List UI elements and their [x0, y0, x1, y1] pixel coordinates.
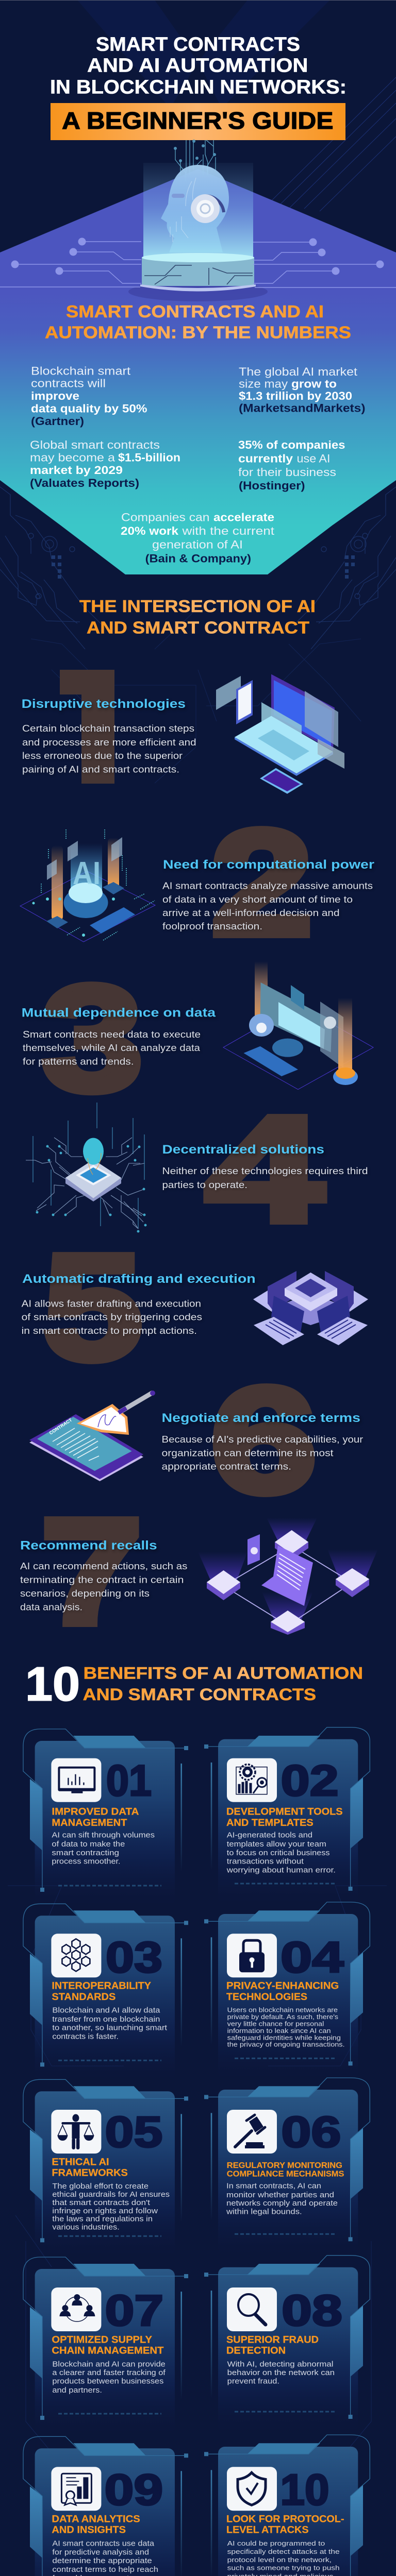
stat: global smart contracts: $1.5-billion	[118, 451, 180, 464]
title: DEVELOPMENT TOOLS	[226, 1806, 343, 1818]
item 2 text	[162, 881, 373, 931]
stat: accelerate 20% work: (Bain & Company)	[145, 552, 251, 565]
title: IMPROVED DATA	[52, 1806, 139, 1818]
body: process smoother.	[52, 1858, 121, 1866]
heading text	[83, 1664, 363, 1704]
big number 5: 5	[43, 1223, 143, 1391]
title	[227, 2161, 344, 2178]
title	[52, 2514, 140, 2536]
faint network lines	[31, 608, 361, 783]
illustration: data dashboard	[223, 961, 373, 1090]
body: of data to make the	[52, 1840, 125, 1849]
circuit decoration around panel	[0, 487, 103, 649]
stat: global AI market: $1.3 trillion by 2030	[239, 389, 352, 402]
illustration: network of nodes around contract	[198, 1518, 378, 1635]
title: ETHICAL AI	[52, 2157, 109, 2168]
number 01: 01	[106, 1756, 152, 1805]
illustration: laptop	[216, 674, 344, 794]
stat: blockchain smart contracts	[31, 364, 147, 428]
circuit traces left	[0, 238, 141, 287]
item 7 heading: Recommend recalls	[20, 1539, 157, 1553]
body: monitor whether parties and	[226, 2191, 334, 2199]
item 3 text: for patterns and trends.	[23, 1056, 134, 1066]
item 6 text: Because of AI's predictive capabilities, your	[162, 1434, 363, 1445]
body	[227, 2360, 335, 2386]
item 1 heading: Disruptive technologies	[22, 697, 186, 711]
title: AND TEMPLATES	[226, 1817, 314, 1828]
subtitle banner	[51, 103, 345, 140]
body	[227, 2006, 345, 2048]
icon: monitor	[51, 1758, 101, 1802]
body	[227, 2539, 340, 2576]
icon: padlock	[227, 1934, 277, 1977]
body: worrying about human error.	[226, 1867, 336, 1875]
body	[52, 2182, 170, 2232]
stat: global AI market	[239, 365, 365, 414]
body: information to leak since AI can	[227, 2027, 331, 2035]
card 04 frame	[204, 1902, 370, 2079]
number 10: 10	[280, 2465, 329, 2514]
subtitle banner: A BEGINNER'S GUIDE	[62, 107, 333, 134]
title: DATA ANALYTICS	[52, 2514, 140, 2525]
icon: shield with check	[227, 2467, 277, 2511]
stat: accelerate 20% work: with the current	[182, 524, 275, 537]
benefits background lines	[8, 1886, 387, 2576]
panel: by the numbers backdrop	[0, 169, 396, 574]
icon: hexagon network	[51, 1934, 101, 1977]
body: AI smart contracts use data	[52, 2540, 155, 2548]
title: SUPERIOR FRAUD	[226, 2334, 319, 2345]
title: PRIVACY-ENHANCING	[226, 1980, 339, 1992]
item 2 text: foolproof transaction.	[162, 921, 262, 931]
body: AI could be programmed to	[227, 2539, 325, 2547]
card 03 frame	[23, 1904, 188, 2080]
number 09: 09	[105, 2465, 163, 2514]
stat: accelerate 20% work: generation of AI	[152, 538, 243, 551]
item 3 text	[23, 1029, 201, 1066]
title: AND INSIGHTS	[52, 2524, 126, 2536]
body: specifically detect attacks at the	[227, 2548, 340, 2555]
item 3 heading: Mutual dependence on data	[22, 1006, 216, 1020]
item 5 text: in smart contracts to prompt actions.	[22, 1326, 197, 1336]
title	[52, 1980, 151, 2003]
body: transactions without	[227, 1858, 304, 1866]
stat: blockchain smart contracts: contracts will	[31, 377, 106, 390]
heading text: BENEFITS OF AI AUTOMATION	[84, 1664, 363, 1682]
big number 6: 6	[210, 1356, 317, 1524]
illustration: connected laptops	[253, 1271, 368, 1345]
item 4 text: Neither of these technologies requires third	[162, 1166, 368, 1176]
big number 2: 2	[211, 799, 313, 967]
body: behavior on the network can	[227, 2369, 335, 2377]
big number 1: 1	[55, 644, 127, 812]
body: various industries.	[52, 2224, 120, 2232]
body: determine the appropriate	[52, 2557, 152, 2565]
card 08 frame	[204, 2256, 370, 2432]
stat: 35% of companies: use AI	[297, 452, 330, 465]
illustration: signed contract on tablet	[29, 1391, 155, 1481]
stat: global smart contracts: may become a	[30, 451, 116, 464]
card 09	[51, 2465, 163, 2576]
title: SMART CONTRACTS	[96, 34, 300, 56]
item 4 text	[162, 1166, 368, 1190]
stat: blockchain smart contracts: (Gartner)	[31, 415, 84, 428]
stat: global smart contracts: (Valuates Reports)	[30, 477, 139, 489]
body	[52, 2540, 158, 2576]
body	[226, 2182, 338, 2216]
body	[52, 2360, 166, 2395]
stat: accelerate 20% work: Companies can	[121, 511, 209, 524]
stat: accelerate 20% work	[121, 511, 275, 565]
illustration: AI pillars	[20, 829, 155, 942]
stat: global AI market: (MarketsandMarkets)	[239, 401, 365, 414]
item 5 text: AI allows faster drafting and execution	[22, 1298, 201, 1309]
heading: intersection: THE INTERSECTION OF AI	[79, 597, 316, 616]
item 5: automatic drafting	[22, 1223, 256, 1391]
stat: blockchain smart contracts: data quality by 50%	[31, 402, 147, 415]
body: the privacy of ongoing transactions.	[227, 2041, 345, 2048]
item 1 text: less erroneous due to the superior	[22, 751, 183, 761]
title	[50, 34, 346, 98]
item 1: disruptive technologies	[22, 644, 196, 812]
big number 4: 4	[205, 1085, 325, 1253]
card 07	[51, 2286, 166, 2395]
item 7 text: scenarios, depending on its	[20, 1588, 150, 1599]
item 2: computational power	[162, 799, 375, 967]
card 04	[226, 1933, 345, 2048]
body: templates allow your team	[227, 1840, 326, 1849]
body	[52, 2007, 167, 2041]
body: such as someone trying to push	[227, 2564, 340, 2572]
card 09 frame	[23, 2436, 188, 2576]
item 4: decentralized solutions	[162, 1085, 368, 1253]
card 06	[226, 2108, 344, 2216]
number 06: 06	[281, 2108, 341, 2156]
card 02	[226, 1756, 343, 1875]
circuit decoration, mirrored	[293, 487, 396, 649]
heading: by the numbers: SMART CONTRACTS AND AI	[66, 302, 324, 321]
stat: global AI market: grow to	[291, 377, 337, 390]
body: Blockchain and AI can provide	[52, 2360, 166, 2368]
card 01 frame	[23, 1729, 188, 1906]
illustration: signed contract on tablet: CONTRACT	[48, 1417, 73, 1436]
title: TECHNOLOGIES	[226, 1991, 307, 2003]
item 2 heading: Need for computational power	[163, 858, 375, 872]
item 4 heading: Decentralized solutions	[162, 1143, 324, 1157]
title	[226, 2514, 344, 2536]
number 05: 05	[105, 2108, 162, 2156]
title: AND AI AUTOMATION	[87, 55, 308, 76]
heading text: AND SMART CONTRACTS	[83, 1685, 316, 1704]
body: to another, so launching smart	[52, 2024, 167, 2032]
body: smart contracting	[52, 1849, 119, 1857]
icon: people in a circle	[51, 2287, 101, 2331]
stat: global AI market: The global AI market	[239, 365, 358, 378]
body: private by default. As such, there's	[227, 2013, 339, 2021]
stat: global smart contracts: market by 2029	[30, 464, 123, 477]
heading: intersection	[79, 597, 316, 637]
title	[226, 1806, 343, 1828]
icon: magnifier	[227, 2287, 277, 2331]
stat: 35% of companies: 35% of companies	[238, 438, 345, 451]
title	[52, 1806, 139, 1828]
stat: global AI market: size may	[239, 377, 288, 390]
card 02 frame	[204, 1727, 370, 1904]
item 5 text	[22, 1298, 202, 1336]
title: IN BLOCKCHAIN NETWORKS:	[50, 76, 346, 98]
item 3 text: themselves, while AI can analyze data	[23, 1043, 201, 1053]
title	[52, 2157, 128, 2179]
card 10	[226, 2465, 344, 2576]
stat: accelerate 20% work: 20% work	[121, 524, 179, 537]
body: Blockchain and AI allow data	[52, 2007, 160, 2015]
item 7 text: AI can recommend actions, such as	[20, 1561, 187, 1571]
title: CHAIN MANAGEMENT	[52, 2345, 164, 2356]
item 5 heading: Automatic drafting and execution	[22, 1272, 256, 1286]
body: the laws and regulations in	[52, 2215, 153, 2224]
body: that smart contracts don't	[52, 2199, 150, 2207]
title	[226, 2334, 319, 2356]
body: for predictive analysis and	[52, 2548, 149, 2556]
item 2 text: AI smart contracts analyze massive amounts	[162, 881, 373, 891]
stat: accelerate 20% work: accelerate	[213, 511, 274, 524]
icon: gear and chart	[227, 1758, 277, 1802]
body: Users on blockchain networks are	[227, 2006, 338, 2014]
card 03	[51, 1933, 167, 2041]
stat: 35% of companies: for their business	[238, 466, 336, 479]
big number 7: 7	[41, 1487, 143, 1655]
number 08: 08	[282, 2286, 342, 2335]
big number 1	[60, 670, 114, 784]
stat: blockchain smart contracts: Blockchain smart	[31, 364, 131, 377]
number 02: 02	[281, 1756, 339, 1805]
item 3: mutual dependence	[22, 954, 216, 1122]
big number 3: 3	[42, 954, 143, 1122]
title: STANDARDS	[52, 1991, 116, 2003]
title: FRAMEWORKS	[52, 2167, 128, 2179]
body: a clearer and faster tracking of	[52, 2369, 166, 2377]
heading: by the numbers: AUTOMATION: BY THE NUMBERS	[45, 323, 351, 342]
stat: global smart contracts	[30, 438, 180, 489]
number 07: 07	[105, 2286, 163, 2335]
title: DETECTION	[226, 2345, 286, 2356]
item 2 text: arrive at a well-informed decision and	[162, 908, 339, 918]
card 10 frame	[204, 2435, 370, 2576]
title	[226, 1980, 339, 2003]
body	[52, 1832, 155, 1866]
item 6: negotiate	[162, 1356, 363, 1524]
item 7: recommend recalls	[20, 1487, 187, 1655]
item 6 heading: Negotiate and enforce terms	[162, 1411, 360, 1425]
icon: gavel	[227, 2110, 277, 2154]
item 5 text: of smart contracts by triggering codes	[22, 1312, 202, 1322]
item 1 text: pairing of AI and smart contracts.	[22, 764, 179, 774]
body: networks comply and operate	[226, 2199, 338, 2208]
heading: 10 benefits	[25, 1657, 363, 1711]
body: With AI, detecting abnormal	[227, 2360, 333, 2368]
stat: 35% of companies: (Hostinger)	[239, 479, 305, 492]
body: within legal bounds.	[226, 2208, 302, 2216]
title: INTEROPERABILITY	[52, 1980, 151, 1992]
illustration: AI head in glass capsule	[128, 140, 268, 301]
stat: 35% of companies	[238, 438, 345, 492]
circuit traces right	[253, 238, 396, 287]
item 4 text: parties to operate.	[162, 1180, 248, 1190]
item 3 text: Smart contracts need data to execute	[23, 1029, 201, 1040]
title: LEVEL ATTACKS	[226, 2524, 309, 2536]
illustration: chip and brain	[26, 1103, 146, 1232]
body: and partners.	[52, 2386, 102, 2395]
body: contract terms to help reach	[52, 2566, 158, 2574]
body: products between businesses	[52, 2378, 163, 2386]
body: very little chance for personal	[227, 2020, 324, 2028]
heading: intersection: AND SMART CONTRACT	[87, 618, 309, 637]
item 6 text	[162, 1434, 363, 1472]
body: safeguard identities while keeping	[227, 2033, 341, 2041]
card 05	[51, 2108, 170, 2232]
item 2 text: of data in a very short amount of time to	[162, 894, 353, 905]
card 07 frame	[23, 2257, 188, 2434]
card 01	[51, 1756, 155, 1866]
header background decoration	[0, 0, 396, 211]
body: protocol level on the network,	[227, 2556, 332, 2564]
item 7 text: data analysis.	[20, 1602, 82, 1613]
illustration: AI pillars: AI	[73, 856, 101, 891]
body	[226, 1832, 336, 1875]
title: LOOK FOR PROTOCOL-	[226, 2514, 344, 2525]
title: REGULATORY MONITORING	[227, 2161, 342, 2170]
card 08	[226, 2286, 342, 2386]
heading: by the numbers	[45, 302, 351, 342]
body: to focus on critical business	[227, 1849, 330, 1857]
body: transfer from one blockchain	[52, 2015, 160, 2024]
stat: blockchain smart contracts: improve	[31, 389, 79, 402]
body: The global effort to create	[52, 2182, 148, 2191]
item 1 text	[22, 723, 196, 774]
icon: document with chart	[51, 2467, 101, 2511]
body: infringe on rights and follow	[52, 2207, 158, 2215]
title: COMPLIANCE MECHANISMS	[227, 2170, 344, 2178]
body: contracts is faster.	[52, 2032, 119, 2041]
item 7 text: terminating the contract in certain	[20, 1575, 184, 1585]
item 6 text: organization can determine its most	[162, 1448, 333, 1459]
icon: person with scales	[51, 2110, 101, 2154]
item 7 text	[20, 1561, 187, 1613]
body: AI can sift through volumes	[52, 1832, 155, 1840]
title: MANAGEMENT	[52, 1817, 127, 1828]
item 1 text: Certain blockchain transaction steps	[22, 723, 194, 734]
title	[52, 2334, 164, 2356]
body: In smart contracts, AI can	[226, 2182, 321, 2190]
body: AI-generated tools and	[227, 1832, 312, 1840]
card 06 frame	[204, 2078, 370, 2255]
body: prevent fraud.	[227, 2378, 279, 2386]
item 1 text: and processes are more efficient and	[22, 737, 196, 748]
item 6 text: appropriate contract terms.	[162, 1462, 291, 1472]
stat: global smart contracts: Global smart contracts	[30, 438, 160, 451]
number 03: 03	[106, 1933, 162, 1981]
stat: 35% of companies: currently	[238, 452, 293, 465]
number 10: 10	[25, 1657, 80, 1711]
body: ethical guardrails for AI ensures	[52, 2191, 170, 2199]
title: OPTIMIZED SUPPLY	[52, 2334, 152, 2345]
number 04: 04	[280, 1933, 344, 1981]
card 05 frame	[23, 2079, 188, 2256]
